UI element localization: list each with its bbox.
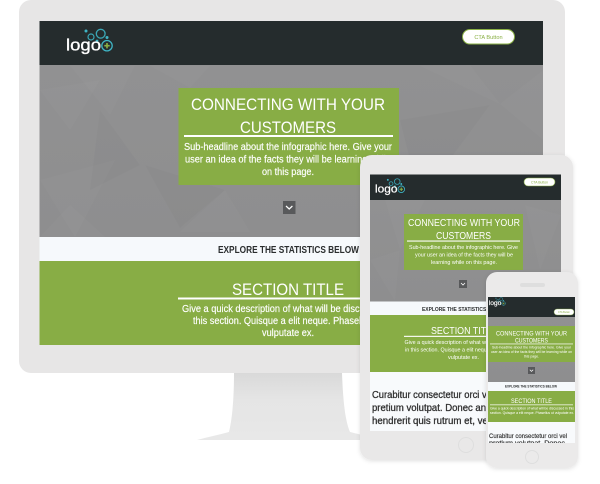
tablet (360, 155, 573, 460)
phone section panel (488, 391, 575, 422)
sub-headline: Sub-headline about the infographic here. Give your (184, 142, 393, 153)
explore band: EXPLORE THE STATISTICS BELOW (218, 245, 360, 256)
tablet section panel (370, 315, 561, 372)
tablet section panel: in this section. Quisque a elit neque. Phasellus ut (405, 348, 522, 354)
tablet headline box (404, 214, 523, 270)
explore band (40, 237, 543, 261)
tablet body copy: hendrerit quis rutrum et, vel (372, 416, 490, 427)
section description (182, 304, 394, 339)
tablet body copy (370, 372, 561, 431)
tablet hero (370, 200, 561, 302)
icon: phone logo (489, 298, 505, 307)
tablet section panel: SECTION TITLE (431, 326, 497, 337)
tablet CTA (524, 178, 555, 186)
phone body copy: Curabitur consectetur orci vel (489, 434, 567, 440)
phone speaker (520, 283, 545, 287)
headline: CONNECTING WITH YOUR (191, 95, 385, 114)
CTA button: CTA Button (474, 35, 503, 41)
headline: CUSTOMERS (240, 118, 336, 137)
tablet body copy: Curabitur consectetur orci vel (372, 390, 494, 401)
tablet header (370, 174, 561, 200)
monitor (19, 0, 565, 373)
tablet section panel: Give a quick description of what will be discussed (404, 340, 522, 346)
phone headline box: Sub-headline about the infographic here. Give your (492, 346, 572, 350)
tablet CTA: CTA Button (531, 180, 548, 184)
icon: logo (66, 29, 112, 54)
phone hero (488, 317, 575, 382)
CTA button (462, 30, 514, 44)
section description: this section. Quisque a elit neque. Phasellus ut (193, 316, 383, 327)
sub-headline (184, 142, 393, 178)
monitor stand (197, 373, 382, 440)
phone section panel: Give a quick description of what will be discussed in this (490, 406, 574, 410)
tablet explore band: EXPLORE THE STATISTICS BELOW (422, 307, 506, 313)
phone CTA (554, 309, 574, 315)
tablet headline box: learning while on this page. (431, 260, 497, 266)
icon: tablet chevron (459, 280, 467, 288)
tablet headline box: CUSTOMERS (436, 231, 491, 242)
phone headline box: CONNECTING WITH YOUR (496, 330, 567, 338)
tablet body copy: pretium volutpat. Donec ante (372, 403, 494, 414)
phone section panel: section. Quisque a elit neque. Phasellus ut vulputate ex. (490, 411, 574, 415)
tablet headline box: Sub-headline about the infographic here. Give (409, 245, 518, 251)
section title: SECTION TITLE (232, 280, 344, 299)
phone section panel: SECTION TITLE (511, 399, 552, 405)
tablet headline box: CONNECTING WITH YOUR (408, 218, 520, 229)
phone CTA: CTA Button (558, 311, 571, 314)
icon: tablet logo (375, 179, 405, 195)
phone headline box: this page. (524, 355, 539, 359)
tablet section panel: vulputate ex. (448, 355, 479, 361)
icon: chevron button (283, 201, 296, 214)
icon: phone chevron (528, 367, 535, 374)
headline (191, 95, 385, 137)
phone headline box (488, 326, 575, 362)
phone headline box: CUSTOMERS (515, 338, 549, 344)
phone explore band: EXPLORE THE STATISTICS BELOW (505, 384, 558, 388)
phone (486, 272, 578, 468)
phone body (486, 272, 578, 468)
tablet explore band (370, 302, 561, 315)
sub-headline: on this page. (262, 167, 314, 178)
phone header (488, 297, 575, 317)
phone headline box: user an idea of the facts they will be learning while on (491, 350, 572, 354)
phone body copy (488, 422, 575, 443)
hero background (40, 65, 543, 237)
tablet headline box: your user an idea of the facts they will be (415, 252, 513, 258)
monitor bezel (19, 0, 565, 373)
section description: vulputate ex. (262, 328, 314, 339)
phone explore band (488, 382, 575, 391)
tablet body (360, 155, 573, 460)
icon: tablet home button (458, 438, 474, 452)
hero headline box (178, 88, 399, 185)
phone screen (488, 297, 575, 447)
icon: phone home button (526, 450, 538, 464)
section panel (40, 261, 543, 345)
sub-headline: user an idea of the facts they will be learning while (185, 154, 391, 166)
monitor header bar (40, 21, 543, 65)
section description: Give a quick description of what will be discussed in (182, 304, 394, 315)
phone body copy: pretium volutpat. Donec (489, 441, 565, 447)
